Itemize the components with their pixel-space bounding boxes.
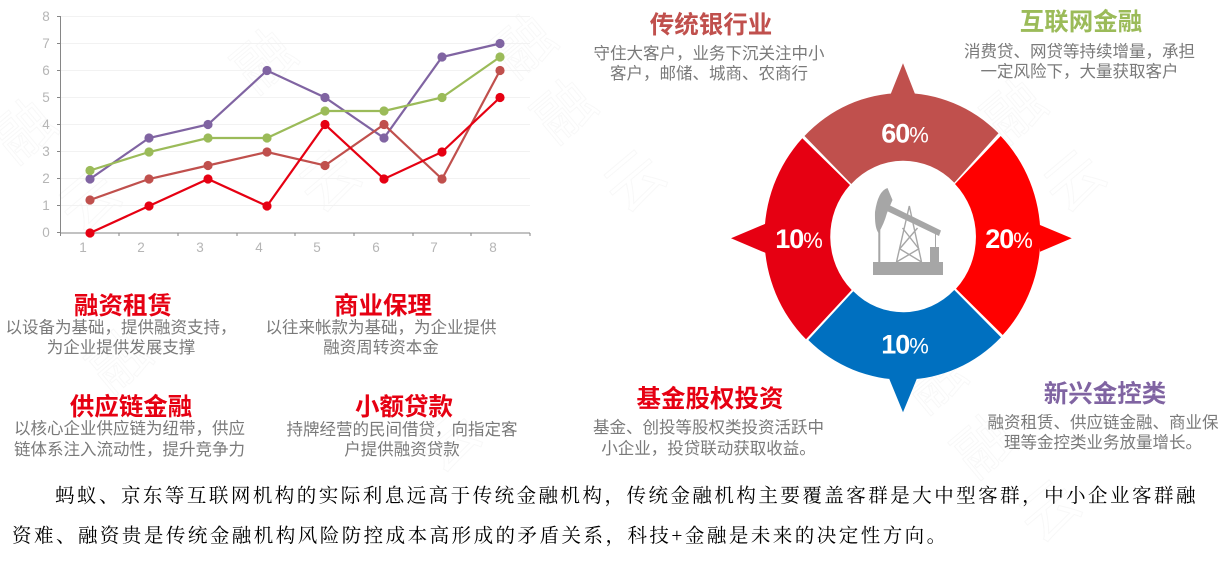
text: 传统银行业: 传统银行业 — [650, 12, 772, 39]
text: 新兴金控类 — [988, 380, 1218, 452]
text: 供应链金融: 链体系注入流动性，提升竞争力 — [14, 441, 245, 459]
text: 传统银行业: 守住大客户，业务下沉关注中小 — [594, 45, 824, 63]
text: 新兴金控类: 理等金控类业务放量增长。 — [1004, 434, 1202, 452]
text: 融资租赁: 以设备为基础，提供融资支持， — [6, 319, 236, 337]
x axis labels: 8 — [489, 240, 497, 255]
y axis labels: 4 — [42, 117, 50, 132]
background watermark: 融 — [212, 6, 310, 108]
text: 供应链金融 — [14, 394, 245, 459]
segment: bottom 10% — [808, 290, 1001, 412]
background watermark: 云 — [277, 126, 375, 228]
segment: right 20%: 20% — [985, 224, 1032, 254]
y axis labels: 8 — [42, 9, 50, 24]
text: 互联网金融 — [964, 8, 1195, 81]
background watermark: 融 — [67, 306, 165, 408]
x axis labels: 5 — [313, 240, 321, 255]
text: 互联网金融: 互联网金融 — [1020, 9, 1142, 36]
text: 小额贷款 — [286, 394, 518, 459]
series: brown — [85, 66, 505, 205]
segment: right 20% — [955, 136, 1072, 335]
conclusion paragraph — [12, 485, 1198, 547]
text: 供应链金融: 供应链金融 — [70, 394, 192, 421]
conclusion paragraph: 蚂蚁、京东等互联网机构的实际利息远高于传统金融机构，传统金融机构主要覆盖客群是大中型客群，中小企业客群融 — [55, 486, 1198, 507]
series: green — [85, 52, 505, 175]
y axis labels: 3 — [42, 144, 50, 159]
text: 融资租赁: 为企业提供发展支撑 — [47, 339, 195, 357]
text: 传统银行业 — [594, 12, 824, 83]
text: 商业保理 — [266, 292, 496, 357]
icon: oil pump — [873, 188, 943, 275]
series: red — [85, 93, 505, 238]
x axis labels: 4 — [255, 240, 263, 255]
y axis labels: 1 — [42, 198, 50, 213]
segment: left 10%: 10% — [775, 224, 822, 254]
y axis labels: 0 — [42, 225, 50, 240]
text: 传统银行业: 客户，邮储、城商、农商行 — [610, 65, 808, 83]
line chart — [42, 9, 530, 255]
y axis labels: 2 — [42, 171, 50, 186]
background watermark: 云 — [582, 126, 680, 228]
background watermark: 云 — [37, 146, 135, 248]
conclusion paragraph: 资难、融资贵是传统金融机构风险防控成本高形成的矛盾关系，科技+金融是未来的决定性方向。 — [12, 526, 949, 547]
x axis labels: 3 — [196, 240, 204, 255]
background watermark: 云 — [1022, 126, 1120, 228]
background watermark: 融 — [512, 56, 610, 158]
text: 商业保理: 以往来帐款为基础，为企业提供 — [266, 319, 496, 337]
background watermark: 云 — [397, 386, 495, 488]
y axis labels: 5 — [42, 90, 50, 105]
x axis labels: 6 — [372, 240, 380, 255]
text: 新兴金控类: 融资租赁、供应链金融、商业保 — [988, 414, 1218, 432]
segment: top 60% — [804, 63, 998, 184]
background watermark: 云 — [997, 456, 1095, 558]
background watermark: 融 — [932, 391, 1030, 493]
text: 基金股权投资: 基金股权投资 — [636, 386, 784, 413]
text: 互联网金融: 一定风险下，大量获取客户 — [980, 63, 1178, 81]
x axis labels — [79, 240, 497, 255]
text: 基金股权投资: 小企业，投贷联动获取收益。 — [601, 440, 816, 458]
x axis labels: 7 — [430, 240, 438, 255]
text: 商业保理: 融资周转资本金 — [323, 339, 439, 357]
text: 融资租赁 — [6, 293, 236, 357]
text: 基金股权投资 — [593, 386, 824, 458]
segment: left 10% — [731, 138, 852, 339]
text: 新兴金控类: 新兴金控类 — [1044, 381, 1166, 408]
text: 融资租赁: 融资租赁 — [74, 293, 172, 320]
segment: top 60%: 60% — [881, 118, 928, 148]
background watermark: 融 — [962, 56, 1060, 158]
segment: bottom 10%: 10% — [881, 330, 928, 360]
x axis labels: 1 — [79, 240, 87, 255]
series: purple — [85, 39, 505, 184]
x axis labels: 2 — [137, 240, 145, 255]
background watermark: 融 — [882, 326, 980, 428]
text: 互联网金融: 消费贷、网贷等持续增量，承担 — [964, 43, 1195, 61]
y axis labels — [42, 9, 50, 240]
y axis labels: 6 — [42, 63, 50, 78]
text: 供应链金融: 以核心企业供应链为纽带，供应 — [14, 420, 245, 438]
text: 小额贷款: 小额贷款 — [355, 394, 453, 421]
text: 小额贷款: 户提供融资贷款 — [344, 441, 460, 459]
text: 小额贷款: 持牌经营的民间借贷，向指定客 — [286, 421, 518, 439]
y axis labels: 7 — [42, 36, 50, 51]
text: 商业保理: 商业保理 — [334, 293, 432, 320]
text: 基金股权投资: 基金、创投等股权类投资活跃中 — [593, 419, 824, 437]
